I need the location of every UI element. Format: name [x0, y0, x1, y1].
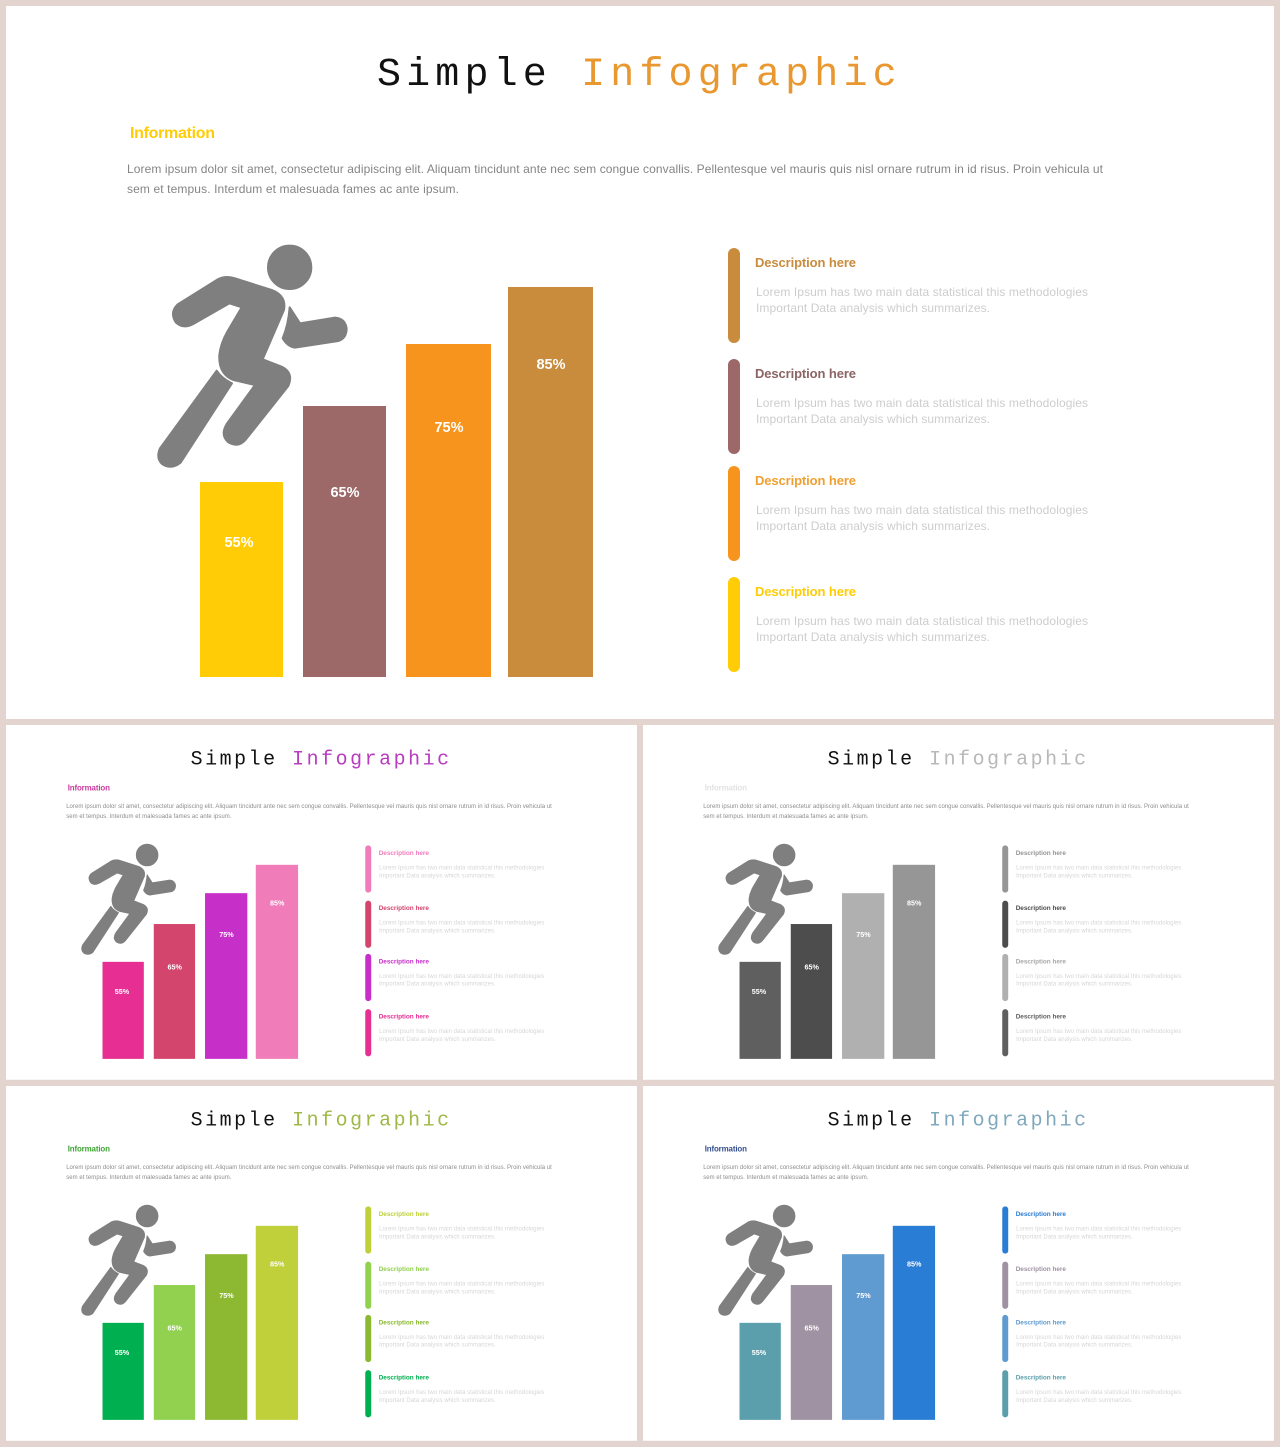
description list: Important Data analysis which summarizes. [756, 412, 990, 426]
intro paragraph: sem et tempus. Interdum et malesuada fames ac ante ipsum. [127, 182, 459, 196]
panel: pink theme slide [6, 725, 637, 1080]
description list: Important Data analysis which summarizes. [1016, 1398, 1133, 1404]
bar chart: 85% [907, 899, 922, 908]
description list: Lorem Ipsum has two main data statistical this methodologies [1016, 974, 1181, 980]
description list: Lorem Ipsum has two main data statistical this methodologies [756, 503, 1088, 517]
icon: running figure [719, 1205, 812, 1315]
description list: Important Data analysis which summarizes. [1016, 982, 1133, 988]
description list: Description here [379, 1014, 429, 1021]
bar chart: 55% [115, 1348, 130, 1357]
description list: Description here [1016, 1375, 1066, 1382]
description list: Description here [755, 366, 856, 381]
bar chart: 65% [804, 962, 819, 971]
description list: Important Data analysis which summarizes. [756, 519, 990, 533]
description list: Description here [1016, 850, 1066, 857]
intro paragraph: sem et tempus. Interdum et malesuada fames ac ante ipsum. [703, 1175, 869, 1181]
bar chart: 65% [167, 1323, 182, 1332]
description list: Lorem Ipsum has two main data statistical this methodologies [379, 865, 544, 871]
bar chart [200, 287, 593, 677]
description list: Important Data analysis which summarizes. [1016, 1343, 1133, 1349]
description list: Lorem Ipsum has two main data statistical this methodologies [379, 1282, 544, 1288]
bar chart: 65% [167, 962, 182, 971]
intro paragraph: sem et tempus. Interdum et malesuada fames ac ante ipsum. [703, 814, 869, 820]
bar chart: 75% [219, 930, 234, 939]
description list: Description here [379, 958, 429, 965]
panel: grey theme slide [643, 725, 1274, 1080]
description list: Lorem Ipsum has two main data statistical this methodologies [1016, 1390, 1181, 1396]
heading: information: Information [705, 784, 747, 793]
description list: Description here [1016, 1266, 1066, 1273]
panel: main slide, orange theme [6, 6, 1274, 719]
description list: Important Data analysis which summarizes. [379, 1343, 496, 1349]
description list: Description here [379, 850, 429, 857]
bar chart: 75% [856, 1291, 871, 1300]
bar chart: 85% [270, 899, 285, 908]
heading: information: Information [130, 125, 215, 142]
intro paragraph [703, 804, 1189, 820]
description list: Description here [379, 1319, 429, 1326]
bar chart [103, 865, 298, 1059]
bar chart: 55% [115, 987, 130, 996]
description list: Description here [379, 905, 429, 912]
description list: Important Data analysis which summarizes. [1016, 1289, 1133, 1295]
panel: blue theme slide [643, 1086, 1274, 1441]
description list: Lorem Ipsum has two main data statistical this methodologies [379, 974, 544, 980]
bar chart: 85% [907, 1260, 922, 1269]
bar chart [740, 1226, 935, 1420]
description list [365, 1206, 544, 1417]
bar chart: 55% [752, 1348, 767, 1357]
intro paragraph [127, 162, 1104, 196]
description list: Description here [1016, 905, 1066, 912]
intro paragraph: Lorem ipsum dolor sit amet, consectetur adipiscing elit. Aliquam tincidunt ante nec sem congue convallis. Pellentesque vel mauris quis nisl ornare rutrum in id risus. Proin vehicula ut [66, 1165, 552, 1171]
bar chart [740, 865, 935, 1059]
bar chart: 55% [224, 535, 254, 551]
intro paragraph: Lorem ipsum dolor sit amet, consectetur adipiscing elit. Aliquam tincidunt ante nec sem congue convallis. Pellentesque vel mauris quis nisl ornare rutrum in id risus. Proin vehicula ut [127, 162, 1104, 176]
description list: Description here [1016, 1211, 1066, 1218]
title: Simple Infographic [377, 53, 902, 98]
intro paragraph: sem et tempus. Interdum et malesuada fames ac ante ipsum. [66, 814, 232, 820]
description list: Important Data analysis which summarizes. [379, 1289, 496, 1295]
description list: Important Data analysis which summarizes. [379, 982, 496, 988]
panel: green theme slide [6, 1086, 637, 1441]
description list: Description here [379, 1375, 429, 1382]
description list: Lorem Ipsum has two main data statistical this methodologies [1016, 1226, 1181, 1232]
description list: Lorem Ipsum has two main data statistical this methodologies [756, 396, 1088, 410]
description list: Description here [755, 473, 856, 488]
description list: Important Data analysis which summarizes. [1016, 873, 1133, 879]
description list [728, 248, 1088, 672]
description list: Important Data analysis which summarizes. [756, 630, 990, 644]
heading: information: Information [68, 784, 110, 793]
intro paragraph: Lorem ipsum dolor sit amet, consectetur adipiscing elit. Aliquam tincidunt ante nec sem congue convallis. Pellentesque vel mauris quis nisl ornare rutrum in id risus. Proin vehicula ut [703, 804, 1189, 810]
intro paragraph [66, 1165, 552, 1181]
description list: Lorem Ipsum has two main data statistical this methodologies [1016, 1282, 1181, 1288]
description list: Lorem Ipsum has two main data statistical this methodologies [379, 1226, 544, 1232]
heading: information: Information [68, 1145, 110, 1154]
description list: Description here [1016, 1319, 1066, 1326]
description list: Important Data analysis which summarizes. [1016, 1234, 1133, 1240]
bar chart: 55% [752, 987, 767, 996]
description list: Important Data analysis which summarizes. [756, 301, 990, 315]
bar chart: 65% [330, 485, 360, 501]
description list: Description here [755, 584, 856, 599]
description list: Important Data analysis which summarizes. [379, 1234, 496, 1240]
intro paragraph [703, 1165, 1189, 1181]
title: Simple Infographic [828, 1108, 1089, 1131]
intro paragraph: sem et tempus. Interdum et malesuada fames ac ante ipsum. [66, 1175, 232, 1181]
description list: Important Data analysis which summarizes. [379, 873, 496, 879]
intro paragraph: Lorem ipsum dolor sit amet, consectetur adipiscing elit. Aliquam tincidunt ante nec sem congue convallis. Pellentesque vel mauris quis nisl ornare rutrum in id risus. Proin vehicula ut [703, 1165, 1189, 1171]
description list [1002, 845, 1181, 1056]
description list: Lorem Ipsum has two main data statistical this methodologies [756, 285, 1088, 299]
description list: Lorem Ipsum has two main data statistical this methodologies [1016, 865, 1181, 871]
description list: Lorem Ipsum has two main data statistical this methodologies [379, 1029, 544, 1035]
icon: running figure [82, 1205, 175, 1315]
icon: running figure [719, 844, 812, 954]
bar chart: 65% [804, 1323, 819, 1332]
description list: Lorem Ipsum has two main data statistical this methodologies [379, 921, 544, 927]
icon: running figure [158, 246, 347, 467]
description list [1002, 1206, 1181, 1417]
description list: Description here [1016, 1014, 1066, 1021]
description list: Lorem Ipsum has two main data statistical this methodologies [1016, 921, 1181, 927]
bar chart: 75% [219, 1291, 234, 1300]
description list: Important Data analysis which summarizes. [1016, 928, 1133, 934]
description list: Important Data analysis which summarizes. [1016, 1037, 1133, 1043]
heading: information: Information [705, 1145, 747, 1154]
bar chart: 75% [434, 420, 464, 436]
description list: Lorem Ipsum has two main data statistical this methodologies [1016, 1029, 1181, 1035]
bar chart: 85% [536, 357, 566, 373]
intro paragraph: Lorem ipsum dolor sit amet, consectetur adipiscing elit. Aliquam tincidunt ante nec sem congue convallis. Pellentesque vel mauris quis nisl ornare rutrum in id risus. Proin vehicula ut [66, 804, 552, 810]
description list: Description here [379, 1211, 429, 1218]
title: Simple Infographic [191, 1108, 452, 1131]
title: Simple Infographic [191, 747, 452, 770]
description list: Lorem Ipsum has two main data statistical this methodologies [1016, 1335, 1181, 1341]
description list: Description here [755, 255, 856, 270]
bar chart: 85% [270, 1260, 285, 1269]
title: Simple Infographic [828, 747, 1089, 770]
description list: Lorem Ipsum has two main data statistical this methodologies [379, 1390, 544, 1396]
intro paragraph [66, 804, 552, 820]
description list: Important Data analysis which summarizes. [379, 928, 496, 934]
description list: Lorem Ipsum has two main data statistical this methodologies [379, 1335, 544, 1341]
description list: Lorem Ipsum has two main data statistical this methodologies [756, 614, 1088, 628]
bar chart: 75% [856, 930, 871, 939]
description list: Description here [379, 1266, 429, 1273]
description list: Description here [1016, 958, 1066, 965]
description list [365, 845, 544, 1056]
bar chart [103, 1226, 298, 1420]
icon: running figure [82, 844, 175, 954]
description list: Important Data analysis which summarizes. [379, 1398, 496, 1404]
description list: Important Data analysis which summarizes. [379, 1037, 496, 1043]
